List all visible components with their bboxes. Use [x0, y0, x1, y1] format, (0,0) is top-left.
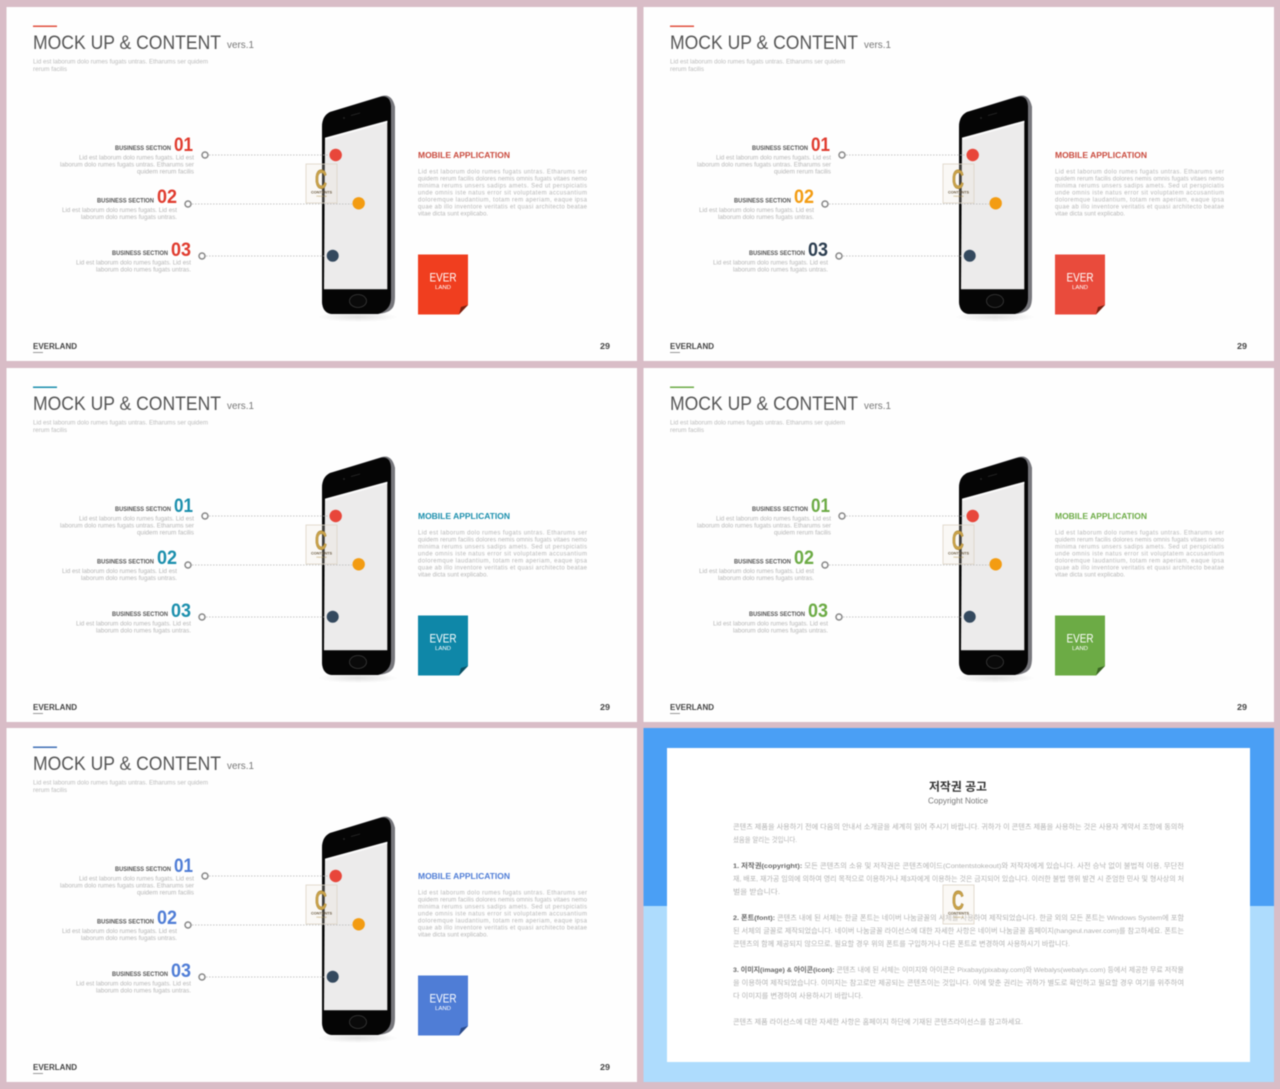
watermark logo: PREMIUM: [316, 196, 327, 198]
watermark logo: PREMIUM: [953, 917, 964, 919]
section 03: Lid est laborum dolo rumes fugats. Lid est: [713, 260, 828, 266]
watermark logo: PREMIUM: [953, 196, 964, 198]
mobile application text: doloremque laudantium, totam rem aperiam, eaque ipsa: [1055, 198, 1225, 204]
copyright section: 벌을 받습니다.: [733, 887, 780, 896]
slide 3: teal version: [6, 368, 637, 722]
slide 4: green version: [644, 368, 1274, 722]
section 01: [697, 135, 966, 176]
section 01: quidem rerum facilis: [137, 170, 194, 176]
everland card: [418, 616, 468, 676]
font section: 2. 폰트(font): 콘텐츠 내에 된 서체는 한글 폰트는 네이버 나눔글꼴의 서체를 사용하여 제작되었습니다. 한글 외의 모든 폰트는 Windows System에 포함: [733, 913, 1184, 922]
section 03: 03: [171, 961, 191, 982]
accent line: [670, 386, 694, 388]
title: MOCK UP & CONTENT: [670, 32, 858, 54]
mobile application text: minima rerums unsers sadips amets. Sed ut perspiciatis: [418, 904, 587, 910]
mobile application text: Lid est laborum dolo rumes fugats untras. Etharums ser: [1055, 170, 1224, 176]
mobile application text: minima rerums unsers sadips amets. Sed ut perspiciatis: [1055, 184, 1224, 190]
phone marker dots: [327, 149, 365, 262]
watermark logo: PREMIUM: [316, 917, 327, 919]
watermark logo: CONTENTS: [311, 550, 332, 556]
intro paragraph: 콘텐츠 제품을 사용하기 전에 다음의 안내서 소개글을 세계히 읽어 주시기 바랍니다. 귀하가 이 콘텐츠 제품을 사용하는 것은 사용자 계약서 조항에 동의하: [733, 822, 1185, 831]
mobile application text: doloremque laudantium, totam rem aperiam, eaque ipsa: [418, 198, 588, 204]
watermark logo: [306, 164, 337, 203]
mobile application text: Lid est laborum dolo rumes fugats untras. Etharums ser: [1055, 530, 1224, 536]
watermark logo: CONTENTS: [948, 910, 969, 916]
title: vers.1: [227, 400, 254, 412]
subtitle: rerum facilis: [33, 428, 67, 434]
phone mockup: [318, 456, 398, 683]
watermark logo: C: [952, 164, 964, 194]
phone mockup: [955, 456, 1035, 683]
subtitle: Lid est laborum dolo rumes fugats untras. Etharums ser quidem: [33, 60, 208, 66]
title: MOCK UP & CONTENT: [33, 32, 221, 54]
everland card: EVER: [430, 994, 456, 1006]
section 02: 02: [794, 548, 814, 569]
watermark logo: CONTENTS: [948, 550, 969, 556]
subtitle: rerum facilis: [670, 67, 704, 73]
subtitle: [33, 420, 208, 434]
section 01: laborum dolo rumes fugats untras. Etharums ser: [60, 524, 194, 530]
footer brand: EVERLAND: [33, 703, 77, 712]
section 02: Lid est laborum dolo rumes fugats. Lid est: [62, 929, 177, 935]
mobile application text: [418, 151, 588, 218]
slide 6: copyright notice: [644, 728, 1274, 1082]
mobile application text: MOBILE APPLICATION: [1055, 151, 1147, 160]
mobile application text: doloremque laudantium, totam rem aperiam, eaque ipsa: [418, 918, 588, 924]
mobile application text: minima rerums unsers sadips amets. Sed ut perspiciatis: [418, 544, 587, 550]
title: vers.1: [864, 39, 891, 51]
section 03: [76, 601, 326, 634]
section 01: [60, 135, 329, 176]
everland card: LAND: [435, 1006, 451, 1012]
license note: 콘텐츠 제품 라이선스에 대한 자세한 사항은 홈페이지 하단에 기재된 콘텐츠라이선스를 참고하세요.: [733, 1017, 1023, 1026]
section 01: quidem rerum facilis: [774, 530, 831, 536]
section 01: laborum dolo rumes fugats untras. Etharums ser: [60, 162, 194, 168]
section 02: BUSINESS SECTION: [97, 198, 154, 204]
image and icon section: [733, 965, 1184, 1000]
watermark logo: C: [315, 164, 327, 194]
copyright section: 재, 배포, 재가공 임의에 의하여 영리 목적으로 이용하거나 제3자에게 이용하는 것은 금지되어 있습니다. 이러한 불법 행위 발견 시 준엄한 민사 및 형사상의 처: [733, 874, 1184, 883]
watermark logo: [943, 885, 974, 924]
mobile application text: quae ab illo inventore veritatis et quasi architecto beatae: [418, 204, 588, 210]
accent line: [33, 386, 57, 388]
subtitle: [670, 60, 845, 73]
section 01: quidem rerum facilis: [137, 530, 194, 536]
section 01: Lid est laborum dolo rumes fugats. Lid est: [716, 156, 831, 162]
section 01: BUSINESS SECTION: [752, 507, 808, 513]
section 01: laborum dolo rumes fugats untras. Etharums ser: [697, 162, 831, 168]
subtitle: Lid est laborum dolo rumes fugats untras. Etharums ser quidem: [33, 780, 208, 786]
image and icon section: 을 이용하여 제작되었습니다. 이미지는 참고로만 제공되는 콘텐츠이는 것입니다. 이에 맞춘 권리는 귀하가 별도로 확인하고 필요할 경우 여기를 위주하여: [733, 978, 1184, 987]
mobile application text: quidem rerum facilis dolores nemis omnis fugats vitaes nemo: [1055, 176, 1225, 182]
section 02: [699, 548, 989, 582]
section 01: BUSINESS SECTION: [115, 146, 171, 152]
section 01: Lid est laborum dolo rumes fugats. Lid est: [716, 516, 831, 522]
slide 5: blue version: [6, 728, 637, 1082]
section 03: [713, 240, 963, 274]
section 02: Lid est laborum dolo rumes fugats. Lid est: [699, 569, 814, 575]
section 01: [60, 496, 329, 536]
mobile application text: quae ab illo inventore veritatis et quasi architecto beatae: [418, 926, 588, 932]
intro paragraph: 셨음을 알리는 것입니다.: [733, 835, 797, 844]
footer brand: EVERLAND: [33, 1063, 77, 1072]
subtitle: Lid est laborum dolo rumes fugats untras. Etharums ser quidem: [33, 420, 208, 426]
mobile application text: vitae dicta sunt explicabo.: [418, 572, 488, 578]
everland card: EVER: [1066, 272, 1094, 284]
mobile application text: unde omnis iste natus error sit voluptatem accusantium: [418, 552, 587, 558]
subtitle: rerum facilis: [33, 788, 67, 794]
mobile application text: Lid est laborum dolo rumes fugats untras. Etharums ser: [418, 890, 587, 896]
section 02: Lid est laborum dolo rumes fugats. Lid est: [62, 208, 177, 214]
section 03: laborum dolo rumes fugats untras.: [733, 628, 828, 634]
mobile application text: unde omnis iste natus error sit voluptatem accusantium: [1055, 552, 1224, 558]
image and icon section: 3. 이미지(image) & 아이콘(icon): 콘텐츠 내에 된 서체는 이미지와 아이콘은 Pixabay(pixabay.com)와 Webalys(webalys.com) 등에서 제공한 무료 저작물: [733, 965, 1184, 974]
subtitle: rerum facilis: [33, 67, 67, 73]
slide 1: red version: [6, 7, 637, 361]
mobile application text: Lid est laborum dolo rumes fugats untras. Etharums ser: [418, 170, 587, 176]
mobile application text: MOBILE APPLICATION: [1055, 512, 1147, 521]
section 01: 01: [811, 135, 830, 156]
subtitle: Lid est laborum dolo rumes fugats untras. Etharums ser quidem: [670, 60, 845, 66]
section 02: 02: [794, 187, 814, 208]
accent line: [33, 26, 57, 27]
section 02: laborum dolo rumes fugats untras.: [718, 576, 814, 582]
everland card: EVER: [430, 634, 456, 646]
font section: [733, 913, 1184, 948]
section 02: BUSINESS SECTION: [734, 560, 791, 566]
section 01: 01: [811, 496, 830, 517]
copyright section: [733, 861, 1184, 896]
everland card: [418, 976, 468, 1036]
everland card: [1055, 254, 1105, 314]
section 01: [60, 856, 329, 896]
section 02: laborum dolo rumes fugats untras.: [81, 936, 177, 942]
everland card: LAND: [435, 646, 451, 652]
mobile application text: Lid est laborum dolo rumes fugats untras. Etharums ser: [418, 530, 587, 536]
section 01: BUSINESS SECTION: [115, 867, 171, 873]
section 01: Lid est laborum dolo rumes fugats. Lid est: [79, 876, 194, 882]
section 03: 03: [171, 240, 191, 261]
phone marker dots: [964, 149, 1002, 262]
everland card: EVER: [1066, 634, 1094, 646]
mobile application text: unde omnis iste natus error sit voluptatem accusantium: [418, 190, 587, 196]
phone mockup: [318, 816, 398, 1043]
footer brand: EVERLAND: [33, 342, 77, 351]
section 01: BUSINESS SECTION: [115, 507, 171, 513]
section 01: BUSINESS SECTION: [752, 146, 808, 152]
section 03: BUSINESS SECTION: [112, 251, 168, 257]
copyright section: 1. 저작권(copyright): 모든 콘텐츠의 소유 및 저작권은 콘텐츠에이드(Contentstokeout)와 저작자에게 있습니다. 사전 승낙 없이 불법적 이용, 무단전: [733, 861, 1184, 870]
subtitle: [33, 780, 208, 794]
title: vers.1: [864, 400, 891, 412]
mobile application text: doloremque laudantium, totam rem aperiam, eaque ipsa: [1055, 558, 1225, 564]
section 01: Lid est laborum dolo rumes fugats. Lid est: [79, 156, 194, 162]
section 02: BUSINESS SECTION: [734, 198, 791, 204]
title: MOCK UP & CONTENT: [33, 753, 221, 775]
mobile application text: vitae dicta sunt explicabo.: [1055, 572, 1125, 578]
mobile application text: unde omnis iste natus error sit voluptatem accusantium: [418, 912, 587, 918]
section 03: BUSINESS SECTION: [112, 972, 168, 978]
notice heading: Copyright Notice: [928, 796, 989, 806]
watermark logo: C: [315, 526, 327, 556]
title: vers.1: [227, 39, 254, 51]
mobile application text: unde omnis iste natus error sit voluptatem accusantium: [1055, 190, 1224, 196]
section 03: Lid est laborum dolo rumes fugats. Lid est: [713, 622, 828, 628]
section 03: laborum dolo rumes fugats untras.: [733, 268, 828, 274]
section 02: [699, 187, 989, 221]
section 02: 02: [157, 187, 177, 208]
section 03: laborum dolo rumes fugats untras.: [96, 268, 191, 274]
everland card: LAND: [435, 285, 451, 291]
watermark logo: [306, 525, 337, 564]
mobile application text: [418, 872, 588, 938]
watermark logo: PREMIUM: [953, 557, 964, 559]
section 03: laborum dolo rumes fugats untras.: [96, 988, 191, 994]
section 03: [713, 601, 963, 634]
section 01: 01: [174, 496, 193, 517]
page number: 29: [600, 1063, 611, 1072]
section 01: quidem rerum facilis: [137, 890, 194, 896]
watermark logo: [306, 885, 337, 924]
title: vers.1: [227, 760, 254, 772]
subtitle: rerum facilis: [670, 428, 704, 434]
section 03: [76, 961, 326, 994]
section 02: laborum dolo rumes fugats untras.: [718, 215, 814, 221]
section 01: 01: [174, 135, 193, 156]
mobile application text: [1055, 151, 1225, 218]
section 01: 01: [174, 856, 193, 877]
mobile application text: quidem rerum facilis dolores nemis omnis fugats vitaes nemo: [418, 898, 588, 904]
page number: 29: [1237, 703, 1248, 712]
everland card: LAND: [1072, 646, 1088, 652]
section 03: BUSINESS SECTION: [112, 612, 168, 618]
phone marker dots: [964, 510, 1002, 623]
section 03: 03: [808, 240, 828, 261]
section 02: Lid est laborum dolo rumes fugats. Lid est: [699, 208, 814, 214]
subtitle: [670, 420, 845, 434]
section 01: Lid est laborum dolo rumes fugats. Lid est: [79, 516, 194, 522]
section 03: Lid est laborum dolo rumes fugats. Lid est: [76, 982, 191, 988]
watermark logo: C: [315, 886, 327, 916]
intro paragraph: [733, 822, 1185, 844]
watermark logo: C: [952, 886, 964, 916]
everland card: [418, 254, 468, 314]
accent line: [670, 26, 694, 27]
section 03: laborum dolo rumes fugats untras.: [96, 628, 191, 634]
footer brand: EVERLAND: [670, 703, 714, 712]
section 02: 02: [157, 548, 177, 569]
section 03: 03: [171, 601, 191, 622]
mobile application text: doloremque laudantium, totam rem aperiam, eaque ipsa: [418, 558, 588, 564]
mobile application text: vitae dicta sunt explicabo.: [418, 212, 488, 218]
watermark logo: CONTENTS: [948, 190, 969, 194]
phone mockup: [318, 95, 398, 322]
title: MOCK UP & CONTENT: [670, 393, 858, 415]
watermark logo: CONTENTS: [311, 190, 332, 194]
everland card: EVER: [430, 272, 456, 284]
mobile application text: [1055, 512, 1225, 578]
mobile application text: quae ab illo inventore veritatis et quasi architecto beatae: [1055, 566, 1225, 572]
slide 2: multicolour version: [644, 7, 1274, 361]
page number: 29: [600, 342, 611, 351]
mobile application text: minima rerums unsers sadips amets. Sed ut perspiciatis: [418, 184, 587, 190]
watermark logo: CONTENTS: [311, 910, 332, 916]
phone marker dots: [327, 870, 365, 983]
footer brand: EVERLAND: [670, 342, 714, 351]
section 02: laborum dolo rumes fugats untras.: [81, 215, 177, 221]
everland card: [1055, 616, 1105, 676]
mobile application text: [418, 512, 588, 578]
mobile application text: quae ab illo inventore veritatis et quasi architecto beatae: [418, 566, 588, 572]
image and icon section: 다 이미지를 변경하여 사용하시기 바랍니다.: [733, 991, 863, 1000]
notice card: [667, 748, 1250, 1062]
section 01: [697, 496, 966, 536]
watermark logo: [943, 164, 974, 203]
section 02: [62, 187, 352, 221]
page number: 29: [600, 703, 611, 712]
mobile application text: minima rerums unsers sadips amets. Sed ut perspiciatis: [1055, 544, 1224, 550]
watermark logo: PREMIUM: [316, 557, 327, 559]
mobile application text: vitae dicta sunt explicabo.: [418, 932, 488, 938]
watermark logo: [943, 525, 974, 564]
font section: 콘텐츠의 함께 제공되지 않으므로, 필요할 경우 위의 폰트를 구입하거나 다른 폰트로 변경하여 사용하시기 바랍니다.: [733, 939, 1070, 948]
section 03: 03: [808, 601, 828, 622]
notice heading: 저작권 공고: [929, 780, 987, 794]
page number: 29: [1237, 342, 1248, 351]
notice heading: [928, 780, 989, 806]
section 02: Lid est laborum dolo rumes fugats. Lid est: [62, 569, 177, 575]
mobile application text: MOBILE APPLICATION: [418, 151, 510, 160]
mobile application text: quidem rerum facilis dolores nemis omnis fugats vitaes nemo: [418, 538, 588, 544]
section 03: Lid est laborum dolo rumes fugats. Lid est: [76, 260, 191, 266]
section 03: BUSINESS SECTION: [749, 612, 805, 618]
section 03: [76, 240, 326, 274]
font section: 된 서체의 글꼴로 제작되었습니다. 네이버 나눔글꼴 라이선스에 대한 자세한 사항은 네이버 나눔글꼴 홈페이지(hangeul.naver.com)를 참고하세요. 폰트는: [733, 926, 1184, 935]
section 01: laborum dolo rumes fugats untras. Etharums ser: [697, 524, 831, 530]
mobile application text: quidem rerum facilis dolores nemis omnis fugats vitaes nemo: [1055, 538, 1225, 544]
section 02: [62, 908, 352, 942]
everland card: LAND: [1072, 285, 1088, 291]
subtitle: [33, 60, 208, 73]
section 02: 02: [157, 908, 177, 929]
mobile application text: quae ab illo inventore veritatis et quasi architecto beatae: [1055, 204, 1225, 210]
section 03: BUSINESS SECTION: [749, 251, 805, 257]
section 01: laborum dolo rumes fugats untras. Etharums ser: [60, 884, 194, 890]
mobile application text: MOBILE APPLICATION: [418, 512, 510, 521]
section 02: BUSINESS SECTION: [97, 920, 154, 926]
phone marker dots: [327, 510, 365, 623]
phone mockup: [955, 95, 1035, 322]
subtitle: Lid est laborum dolo rumes fugats untras. Etharums ser quidem: [670, 420, 845, 426]
section 01: quidem rerum facilis: [774, 170, 831, 176]
section 03: Lid est laborum dolo rumes fugats. Lid est: [76, 622, 191, 628]
watermark logo: C: [952, 526, 964, 556]
section 02: laborum dolo rumes fugats untras.: [81, 576, 177, 582]
title: MOCK UP & CONTENT: [33, 393, 221, 415]
section 02: [62, 548, 352, 582]
mobile application text: vitae dicta sunt explicabo.: [1055, 212, 1125, 218]
accent line: [33, 746, 57, 748]
section 02: BUSINESS SECTION: [97, 560, 154, 566]
mobile application text: MOBILE APPLICATION: [418, 872, 510, 881]
mobile application text: quidem rerum facilis dolores nemis omnis fugats vitaes nemo: [418, 176, 588, 182]
